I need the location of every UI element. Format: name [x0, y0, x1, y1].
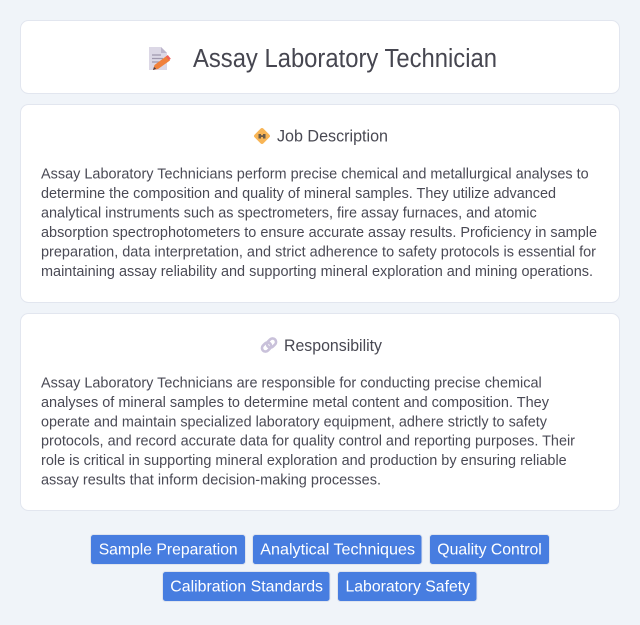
panel: job description: [20, 104, 620, 302]
tag: quality control: [430, 534, 550, 564]
panel: responsibility: [20, 314, 620, 510]
tag: analytical techniques: [252, 534, 422, 564]
heading: job description: Job Description: [277, 128, 388, 146]
tag: analytical techniques: Analytical Techniques: [260, 542, 415, 558]
icon: chain link: [260, 337, 278, 353]
text block: job description: preparation, data interpretation, and strict adherence to safety protocols is essential for: [41, 244, 596, 260]
text block: job description: analytical instruments such as spectrometers, fire assay furnaces, and atomic: [41, 206, 537, 222]
text block: responsibility: analyses of mineral samples to determine metal content and composition. They: [41, 395, 550, 411]
text block: responsibility: assay results that inform decision-making processes.: [41, 472, 381, 488]
text block: job description: determine the composition and quality of mineral samples. They utilize advanced: [41, 186, 556, 202]
tag: sample preparation: [90, 534, 246, 564]
tag: calibration standards: [162, 572, 330, 602]
tag: laboratory safety: Laboratory Safety: [346, 578, 470, 596]
icon: diamond sign: [253, 127, 271, 145]
text block: job description: maintaining assay reliability and supporting mineral exploration and mining operations.: [41, 264, 593, 280]
tag: sample preparation: Sample Preparation: [99, 542, 238, 558]
text block: responsibility: [41, 376, 575, 488]
tag: quality control: Quality Control: [437, 542, 542, 558]
panel: header: [20, 20, 620, 94]
text block: responsibility: role is critical in supporting mineral exploration and production by ensuring reliable: [41, 453, 567, 469]
icon: document with pencil: [149, 47, 171, 70]
heading: responsibility: Responsibility: [284, 337, 383, 355]
tag: laboratory safety: [338, 572, 477, 602]
text block: responsibility: protocols, and record accurate data for quality control and reporting purposes. Their: [41, 434, 575, 450]
text block: job description: [41, 166, 597, 280]
tag: calibration standards: Calibration Standards: [170, 578, 323, 596]
text block: responsibility: operate and maintain specialized laboratory equipment, adhere strictly to safety: [41, 414, 548, 430]
text block: responsibility: Assay Laboratory Technicians are responsible for conducting precise chemical: [41, 376, 542, 392]
text block: job description: Assay Laboratory Technicians perform precise chemical and metallurgical analyses to: [41, 166, 589, 182]
title: Assay Laboratory Technician: [193, 45, 497, 73]
text block: job description: absorption spectrophotometers to ensure accurate assay results. Proficiency in sample: [41, 225, 597, 241]
